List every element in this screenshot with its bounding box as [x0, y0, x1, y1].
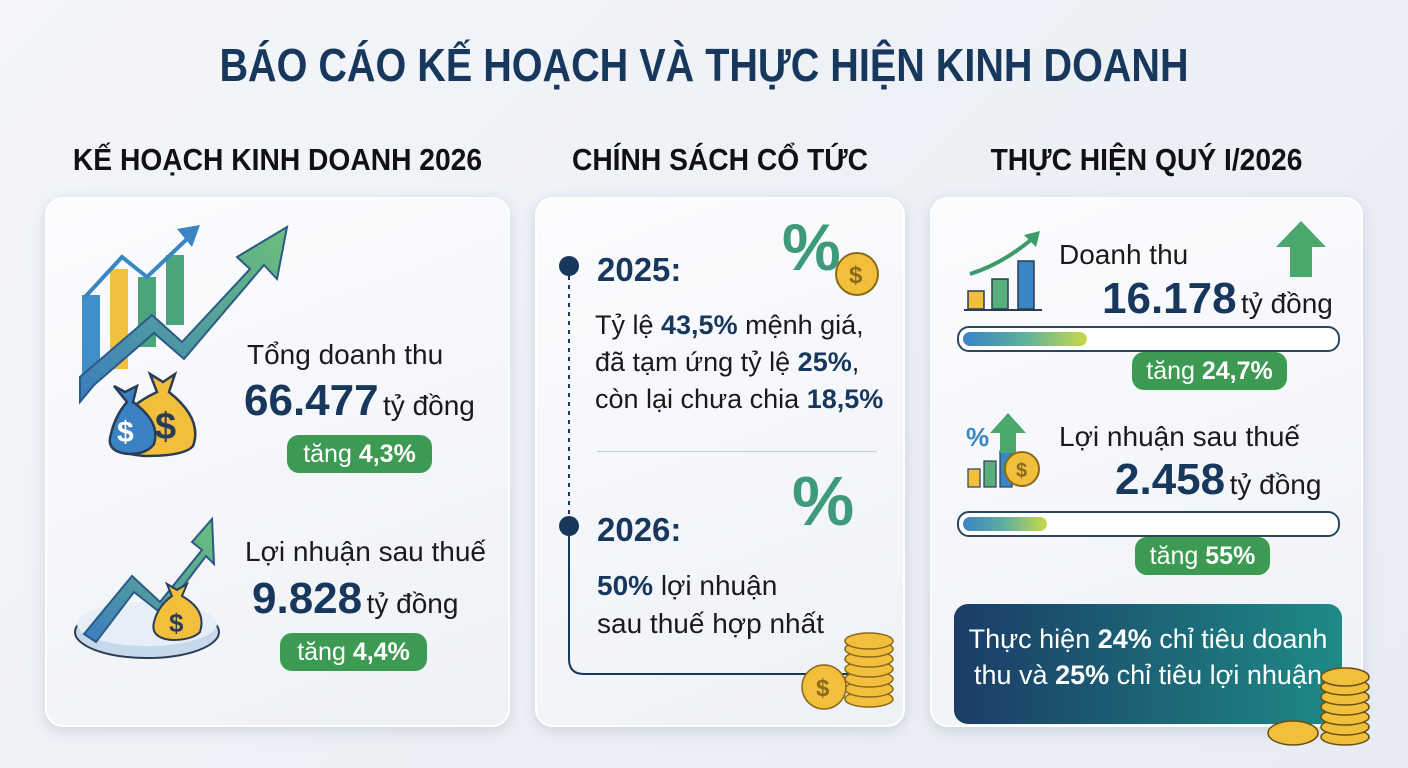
label: 2025: 2025:	[597, 251, 681, 288]
progress bar: lợi nhuận	[957, 511, 1340, 537]
icon: coins bottom right	[1267, 667, 1370, 746]
value: 16.178: 16.178 tỷ đồng	[1102, 274, 1333, 323]
icon: coin stacks: $	[816, 675, 830, 702]
text: 2026 details: 50% lợi nhuận	[597, 570, 777, 601]
label: 2026: 2026:	[597, 511, 681, 548]
pill: tăng 55%: tăng 55%	[1150, 542, 1255, 570]
icon: profit percent coin	[966, 413, 1040, 488]
icon: money bags: $	[117, 416, 134, 449]
icon: money bags: $	[155, 406, 176, 448]
text: 2025 details	[595, 310, 883, 414]
heading: cổ tức: CHÍNH SÁCH CỔ TỨC	[572, 142, 868, 177]
icon: growth chart with arrow	[79, 225, 288, 405]
icon: profit arrow on platform	[74, 516, 220, 659]
icon: revenue bars	[964, 231, 1042, 311]
text: tổng doanh thu: Tổng doanh thu	[247, 339, 443, 370]
pill: tăng 24,7%: tăng 24,7%	[1146, 357, 1273, 385]
callout: summary: thu và 25% chỉ tiêu lợi nhuận	[974, 660, 1322, 690]
heading: kế hoạch: KẾ HOẠCH KINH DOANH 2026	[73, 142, 482, 177]
icon: percent with coin: $	[849, 262, 863, 289]
panel: chính sách cổ tức	[535, 197, 905, 727]
icon: profit arrow on platform: $	[169, 608, 184, 638]
pill: tăng 4,3%: tăng 4,3%	[303, 440, 416, 468]
text: 2025 details: còn lại chưa chia 18,5%	[595, 384, 883, 414]
text: 2026 details: sau thuế hợp nhất	[597, 608, 824, 639]
text: 2026 details	[597, 570, 824, 639]
callout: summary	[954, 604, 1342, 724]
pill: tăng 4,4%: tăng 4,4%	[297, 638, 410, 666]
icon: percent with coin	[782, 210, 879, 296]
icon: money bags	[108, 371, 197, 458]
pill: tăng 24,7%	[1132, 352, 1287, 390]
timeline	[559, 256, 848, 675]
text: doanh thu: Doanh thu	[1059, 239, 1188, 270]
progress bar: doanh thu	[957, 326, 1340, 352]
panel: thực hiện quý I	[930, 197, 1363, 727]
text: lợi nhuận: Lợi nhuận sau thuế	[1059, 421, 1300, 452]
value: 9.828: 9.828 tỷ đồng	[252, 574, 458, 623]
value: 66.477: 66.477 tỷ đồng	[244, 376, 475, 425]
text: 2025 details: đã tạm ứng tỷ lệ 25%,	[595, 347, 859, 377]
icon: percent: %	[792, 462, 854, 540]
icon: percent with coin: %	[782, 210, 841, 284]
heading: thực hiện: THỰC HIỆN QUÝ I/2026	[991, 142, 1302, 177]
callout: summary: Thực hiện 24% chỉ tiêu doanh	[969, 624, 1327, 654]
icon: profit percent coin: %	[966, 422, 989, 452]
icon: up arrow	[1276, 221, 1326, 277]
panel: kế hoạch kinh doanh	[45, 197, 510, 727]
icon: coin stacks	[801, 632, 894, 710]
text: lợi nhuận: Lợi nhuận sau thuế	[245, 536, 486, 567]
text: 2025 details: Tỷ lệ 43,5% mệnh giá,	[595, 310, 864, 340]
title: BÁO CÁO KẾ HOẠCH VÀ THỰC HIỆN KINH DOANH	[219, 39, 1189, 91]
pill: tăng 4,4%	[280, 633, 427, 671]
icon: profit percent coin: $	[1016, 460, 1027, 482]
pill: tăng 55%	[1135, 537, 1270, 575]
value: 2.458: 2.458 tỷ đồng	[1115, 455, 1321, 504]
pill: tăng 4,3%	[287, 435, 432, 473]
